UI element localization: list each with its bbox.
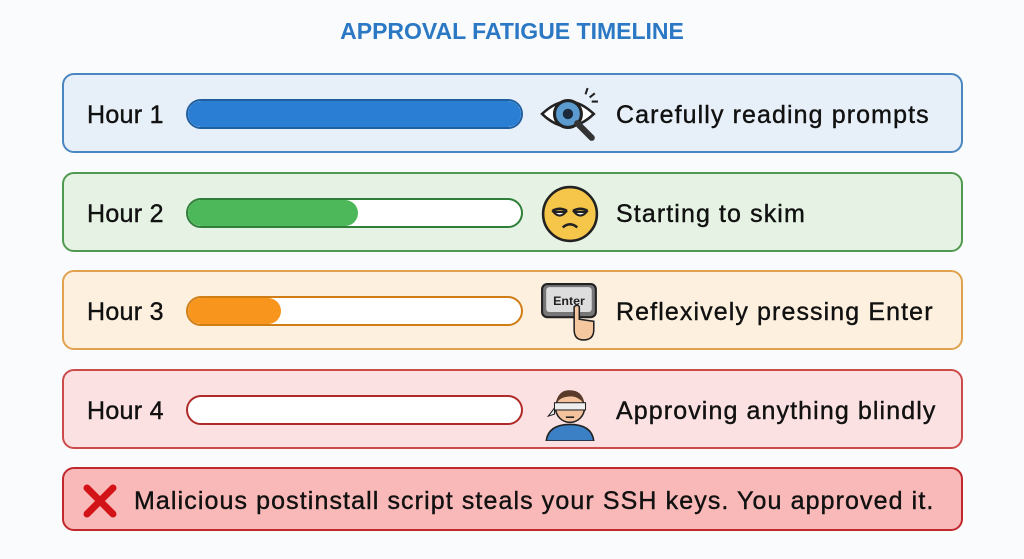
- bar: hour 4: [186, 395, 523, 425]
- panel: hour 2: [62, 172, 963, 252]
- panel: hour 2: Hour 2: [87, 200, 164, 228]
- panel: hour 4: Approving anything blindly: [616, 397, 936, 425]
- icon: enter key: [541, 283, 597, 341]
- panel: hour 3: Reflexively pressing Enter: [616, 298, 934, 326]
- panel: hour 1: [62, 73, 963, 153]
- bar: hour 1: [186, 99, 523, 129]
- panel: hour 3: Hour 3: [87, 298, 164, 326]
- icon: tired face: [542, 186, 598, 242]
- title: APPROVAL FATIGUE TIMELINE: [340, 18, 684, 44]
- panel: hour 4: Hour 4: [87, 397, 164, 425]
- panel: hour 4: [62, 369, 963, 449]
- bar: hour 2: [186, 198, 523, 228]
- panel: hour 1: Hour 1: [87, 101, 164, 129]
- panel: hour 2: Starting to skim: [616, 200, 806, 228]
- icon: red X: [84, 484, 116, 518]
- callout: alert: [62, 467, 963, 531]
- icon: blindfolded person: [545, 390, 595, 441]
- panel: hour 3: [62, 270, 963, 350]
- icon: eye with magnifier: [540, 88, 598, 141]
- icon: enter key: Enter: [553, 294, 585, 308]
- callout: alert: Malicious postinstall script steals your SSH keys. You approved it.: [134, 487, 934, 515]
- bar: hour 3: [186, 296, 523, 326]
- panel: hour 1: Carefully reading prompts: [616, 101, 930, 129]
